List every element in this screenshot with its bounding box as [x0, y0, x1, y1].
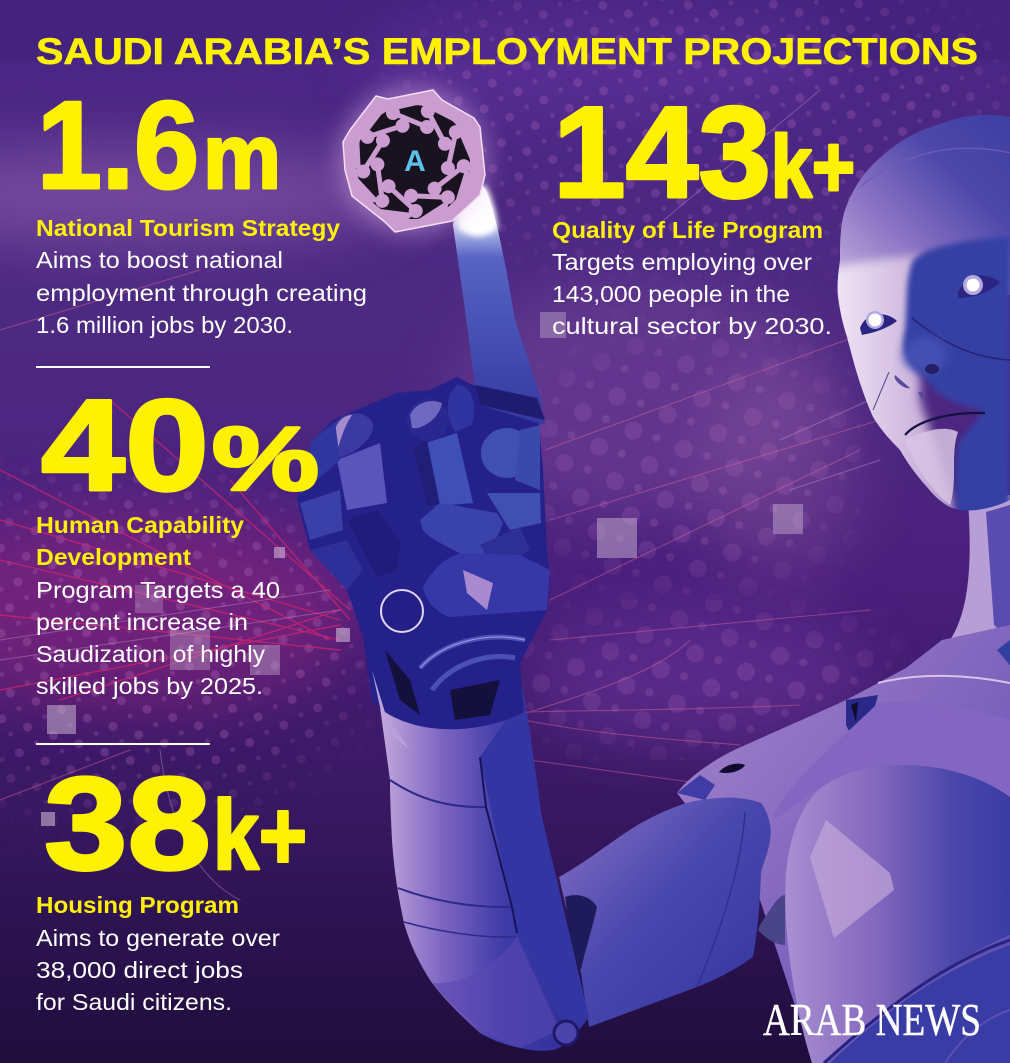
right eye — [958, 275, 1000, 298]
text block: housing program: for Saudi citizens. — [36, 989, 232, 1015]
logo letter: A — [404, 145, 426, 178]
stat: 1.6m: 1.6 — [37, 77, 199, 215]
knuckle one — [331, 413, 373, 458]
arm joint — [565, 895, 597, 970]
light streaks — [0, 90, 1010, 900]
lower band — [830, 945, 1010, 1063]
logo — [339, 86, 487, 234]
left eye — [860, 311, 897, 335]
thumb — [420, 503, 503, 560]
text block: quality of life program: Quality of Life Program — [552, 217, 823, 243]
knuckle two — [407, 399, 449, 441]
robot forearm — [380, 673, 589, 1051]
text block: quality of life program: Targets employing over — [552, 249, 812, 275]
text block: quality of life program — [552, 217, 832, 339]
text block: national tourism strategy: National Tourism Strategy — [36, 215, 340, 241]
stat: 1.6m: m — [203, 106, 281, 208]
left finger panel — [300, 490, 343, 540]
stat: 40%: 40 — [41, 372, 209, 518]
text block: human capability development: Saudization of highly — [36, 641, 266, 667]
neck collar line — [878, 676, 1010, 683]
top plate — [772, 702, 1010, 820]
logo outer polygon — [343, 90, 485, 232]
raised finger — [453, 185, 545, 425]
stat: 38k+: 38 — [44, 750, 211, 897]
rear joint — [758, 895, 785, 945]
text block: human capability development: percent increase in — [36, 609, 248, 635]
text block: human capability development: Human Capability — [36, 512, 244, 538]
pale palm reflection — [463, 570, 493, 610]
text block: human capability development — [36, 512, 280, 699]
palm mass — [297, 377, 550, 729]
wrist mechanics — [385, 650, 500, 720]
stat: 40%: % — [212, 410, 319, 510]
wrist cables — [420, 637, 525, 690]
middle panel — [347, 510, 400, 577]
head seam — [860, 148, 1010, 187]
inner forearm panel — [480, 700, 589, 1040]
stat: 143k+: 143 — [553, 79, 771, 225]
robot upper arm — [559, 798, 785, 1027]
stat: 38k+: k+ — [213, 780, 307, 890]
neck jewel — [997, 640, 1010, 665]
shoulder gap — [846, 695, 878, 745]
right plates — [481, 428, 533, 478]
stat: 143k+: k+ — [771, 117, 855, 216]
text block: national tourism strategy: Aims to boost national — [36, 247, 283, 273]
text block: human capability development: skilled jobs by 2025. — [36, 673, 263, 699]
lower jaw lilac — [905, 429, 958, 505]
cranium — [830, 105, 1010, 295]
nose — [903, 337, 947, 373]
curled finger two — [413, 433, 473, 507]
shoulder slot — [719, 764, 745, 773]
robot torso — [677, 625, 1010, 1063]
text block: human capability development: Development — [36, 544, 191, 570]
elbow bolt — [554, 1021, 578, 1045]
upper shoulder — [677, 625, 1010, 1063]
knuckle three — [448, 385, 474, 432]
forearm bands — [390, 780, 486, 807]
stat: 40% — [41, 372, 319, 518]
title: SAUDI ARABIA’S EMPLOYMENT PROJECTIONS — [36, 31, 978, 72]
text block: housing program: 38,000 direct jobs — [36, 957, 243, 983]
lower left panel — [310, 540, 363, 590]
floating squares — [41, 312, 803, 826]
text block: national tourism strategy: 1.6 million jobs by 2030. — [36, 312, 293, 338]
text block: housing program: Aims to generate over — [36, 925, 280, 951]
pale cheek side — [830, 255, 960, 520]
text block: national tourism strategy — [36, 215, 367, 338]
text block: quality of life program: 143,000 people in the — [552, 281, 790, 307]
logo arms — [349, 97, 478, 225]
text block: quality of life program: cultural sector by 2030. — [552, 313, 832, 339]
logo inner disc — [356, 105, 470, 219]
palm muscle — [423, 553, 550, 617]
curled finger one — [337, 443, 387, 510]
text block: human capability development: Program Targets a 40 — [36, 577, 280, 603]
chest panel — [785, 765, 1010, 1063]
palm ring — [381, 590, 423, 632]
robot neck — [950, 495, 1010, 660]
elbow shade — [432, 937, 560, 1048]
mouth — [905, 413, 985, 435]
blue face shading — [903, 236, 1010, 520]
stat: 38k+ — [44, 750, 307, 897]
robot head — [830, 105, 1010, 520]
text block: housing program — [36, 892, 280, 1015]
chest light patch — [810, 820, 894, 938]
robot hand — [297, 377, 550, 750]
text block: housing program: Housing Program — [36, 892, 239, 918]
text block: national tourism strategy: employment through creating — [36, 280, 367, 306]
